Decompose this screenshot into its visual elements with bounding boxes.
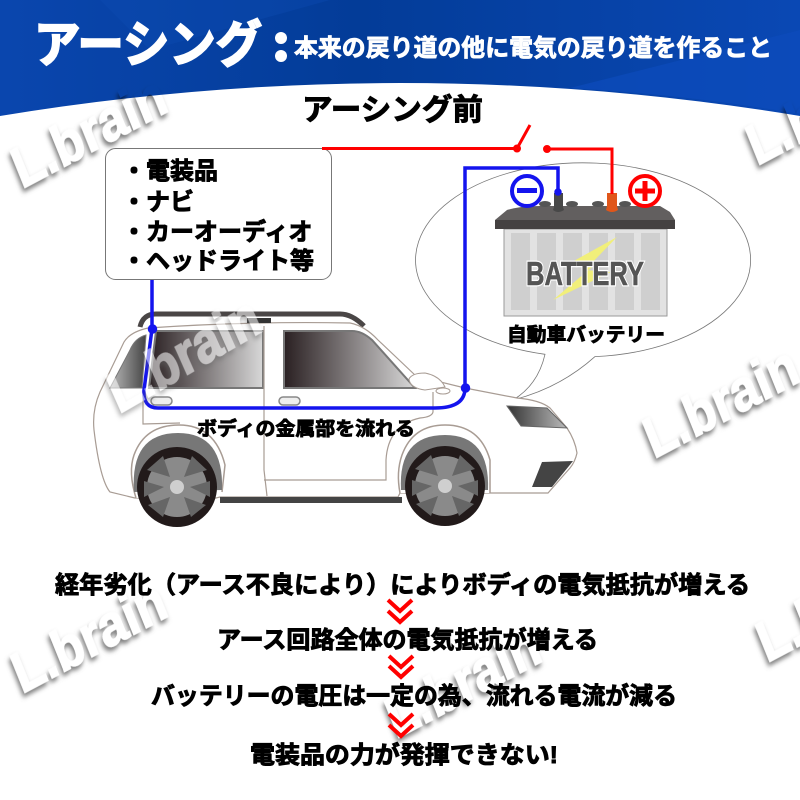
battery caption: 自動車バッテリー [507, 324, 665, 346]
watermarks over content: L.brain [3, 568, 175, 705]
front wheel well [401, 435, 488, 490]
body label: ボディの金属部を流れる [197, 417, 415, 440]
explanation line 4: 電装品の力が発揮できない! [250, 741, 558, 769]
cells [511, 233, 660, 310]
caps [539, 201, 631, 207]
positive terminal [606, 193, 618, 212]
battery body [504, 229, 667, 316]
title [34, 17, 772, 73]
roof rack [140, 314, 364, 327]
front wheel [405, 446, 485, 526]
rear arch [131, 425, 225, 498]
title: アーシング [34, 17, 262, 73]
arrow 3 [389, 714, 413, 736]
callout: electrical components: ・ヘッドライト等 [122, 248, 314, 275]
explanation line 2: アース回路全体の電気抵抗が増える [217, 626, 598, 654]
watermarks over content [3, 283, 800, 750]
side mirror [409, 373, 450, 394]
watermarks over content: L.brain [377, 613, 549, 750]
roof bar [247, 318, 271, 323]
arrow 1 [388, 600, 412, 622]
battery [495, 176, 675, 316]
car body [94, 323, 577, 498]
lightning bolt [553, 237, 617, 300]
minus sign [512, 176, 542, 206]
watermarks behind header: L.brain [3, 63, 175, 200]
front arch [398, 425, 490, 493]
battery label: BATTERY [526, 255, 644, 292]
callout: electrical components: ・カーオーディオ [122, 218, 312, 246]
title: 本来の戻り道の他に電気の戻り道を作ること [294, 35, 772, 62]
battery label: BATTERY [526, 255, 644, 292]
rear wheel [137, 447, 217, 527]
rear wheel well [134, 433, 222, 492]
negative terminal [553, 193, 564, 212]
arrow 2 [389, 656, 413, 677]
callout: electrical components: ・電装品 [122, 158, 218, 185]
red circuit [322, 125, 612, 194]
middle window [149, 331, 263, 388]
watermarks over content: L.brain [98, 283, 269, 425]
watermarks behind header [3, 40, 800, 200]
sill [220, 497, 402, 503]
blue circuit [144, 168, 560, 408]
plus sign [630, 176, 660, 206]
explanation line 3: バッテリーの電圧は一定の為、流れる電流が減る [151, 682, 677, 710]
callout: electrical components: ・ナビ [122, 189, 194, 216]
car illustration [94, 314, 577, 527]
explanation line 1: 経年劣化（アース不良により）によりボディの電気抵抗が増える [55, 571, 750, 599]
headlight [507, 406, 567, 428]
rear quarter window [110, 335, 146, 388]
battery lid [495, 206, 675, 229]
callout: electrical components [106, 148, 332, 280]
front window [284, 331, 415, 388]
callout: battery bubble [416, 163, 751, 400]
door lines [143, 326, 433, 496]
heading: アーシング前 [302, 94, 483, 127]
door handles [151, 397, 300, 405]
fog lamp panel [532, 461, 573, 487]
header banner [0, 0, 800, 116]
